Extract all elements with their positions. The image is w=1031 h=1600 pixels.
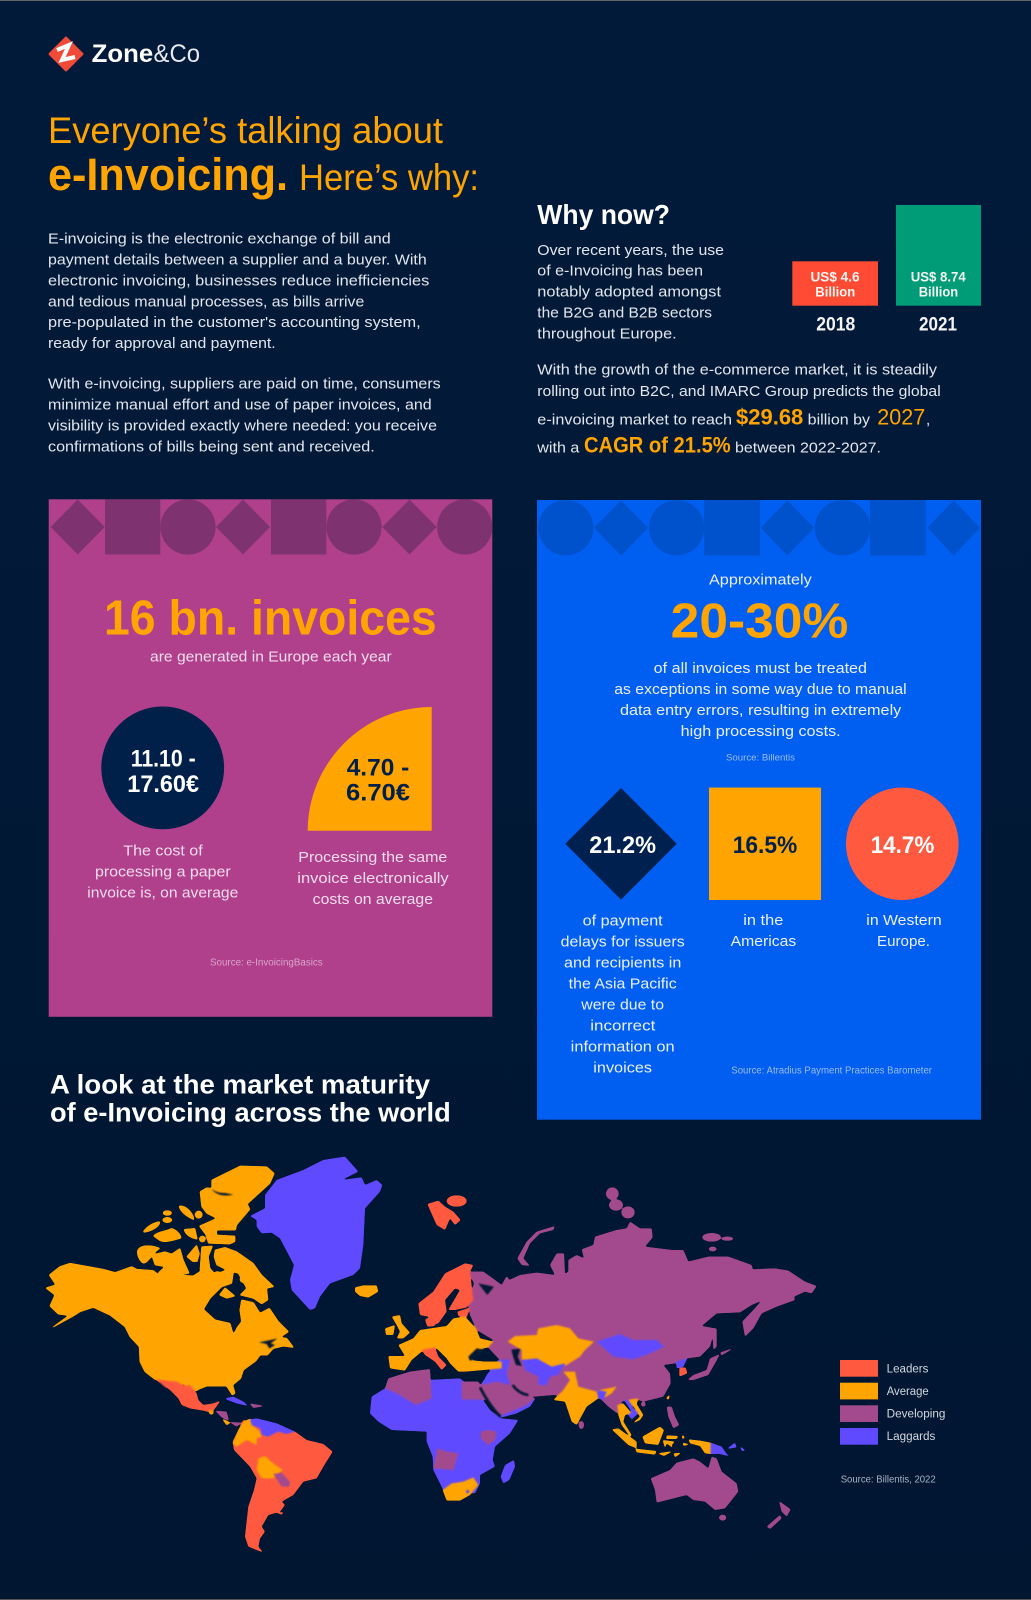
intro text block: confirmations of bills being sent and received. xyxy=(48,438,375,456)
description: high processing costs. xyxy=(681,723,841,740)
Papua New Guinea xyxy=(711,1443,746,1457)
intro text block: With e-invoicing, suppliers are paid on time, consumers xyxy=(48,376,441,393)
logo: Zone&Co xyxy=(50,38,200,70)
source: Source: Atradius Payment Practices Barometer xyxy=(731,1066,933,1077)
heading: market maturity: A look at the market maturity xyxy=(50,1069,430,1099)
Tasmania, New Zealand xyxy=(719,1501,791,1529)
market forecast text: billion by xyxy=(808,411,871,428)
map: Europe and Middle East xyxy=(385,1263,565,1417)
bar chart: market size xyxy=(792,205,981,336)
legend: Average xyxy=(887,1386,929,1398)
legend: Laggards xyxy=(887,1431,936,1443)
square: 16.5% xyxy=(709,788,821,900)
Arctic Canada islands xyxy=(137,1166,274,1304)
heading: market maturity xyxy=(50,1069,451,1128)
Central America xyxy=(209,1410,242,1427)
caption: Asia Pacific: and recipients in xyxy=(564,955,681,972)
caption: Asia Pacific xyxy=(561,913,685,1076)
caption: Asia Pacific: delays for issuers xyxy=(561,934,685,951)
intro text block: visibility is provided exactly where needed: you receive xyxy=(48,418,437,434)
panel: invoice exceptions and payment delays xyxy=(537,500,981,1120)
bar chart: market size: Billion xyxy=(815,285,855,300)
description: of all invoices must be treated xyxy=(654,660,867,677)
Indonesia xyxy=(612,1427,711,1457)
caption: paper: invoice is, on average xyxy=(87,885,238,902)
caption: Western Europe xyxy=(866,912,942,950)
market forecast text: rolling out into B2C, and IMARC Group predicts the global xyxy=(537,383,941,400)
title: Everyone’s talking about xyxy=(48,110,444,151)
caption: Asia Pacific: invoices xyxy=(593,1060,652,1076)
title: Here’s why: xyxy=(299,157,479,198)
panel: paper vs electronic invoice cost xyxy=(49,499,492,1017)
why now text: the B2G and B2B sectors xyxy=(537,305,712,322)
caption: Americas: in the xyxy=(743,912,783,929)
Continental Europe xyxy=(388,1317,502,1372)
bar chart: market size: US$ 8.74 xyxy=(911,269,966,284)
intro text block: and tedious manual processes, as bills arrive xyxy=(48,294,364,310)
market forecast text: e-invoicing market to reach xyxy=(537,411,732,428)
market forecast text xyxy=(536,362,941,458)
intro text block: payment details between a supplier and a buyer. With xyxy=(48,252,427,268)
caption: electronic: invoice electronically xyxy=(297,870,449,887)
diamond: 21.2%: 21.2% xyxy=(589,832,656,859)
headline: 16 bn invoices: 16 bn. invoices xyxy=(104,591,437,645)
caption: paper: processing a paper xyxy=(95,864,231,881)
quarter shape: electronic invoice cost: 6.70€ xyxy=(346,779,410,806)
caption: Americas xyxy=(731,912,796,950)
Mexico xyxy=(155,1379,221,1413)
intro text block: ready for approval and payment. xyxy=(48,335,276,352)
Italy xyxy=(422,1347,447,1370)
Philippines, Taiwan, Hainan xyxy=(641,1394,679,1428)
caption: Western Europe: in Western xyxy=(866,912,942,929)
map: Americas, Greenland xyxy=(46,1157,382,1553)
decorative shape band xyxy=(538,500,980,556)
Mongolia xyxy=(597,1334,664,1359)
source: map: Source: Billentis, 2022 xyxy=(841,1475,936,1486)
circle: 14.7%: 14.7% xyxy=(871,832,934,859)
source: Source: Billentis xyxy=(726,752,796,762)
intro text block xyxy=(48,230,441,456)
intro text block: electronic invoicing, businesses reduce inefficiencies xyxy=(48,272,429,290)
Australia xyxy=(651,1457,738,1510)
map: Africa xyxy=(370,1369,518,1501)
intro text block: minimize manual effort and use of paper invoices, and xyxy=(48,396,432,414)
circle: paper invoice cost: 17.60€ xyxy=(127,771,199,798)
description: as exceptions in some way due to manual xyxy=(614,681,907,698)
caption: paper xyxy=(87,843,238,902)
Middle East xyxy=(480,1353,565,1417)
intro text block: pre-populated in the customer's accounting system, xyxy=(48,314,421,331)
circle: paper invoice cost xyxy=(101,706,224,829)
caption: Western Europe: Europe. xyxy=(877,933,930,950)
source: Source: e-InvoicingBasics xyxy=(210,958,323,969)
why now text: throughout Europe. xyxy=(537,326,677,343)
circle: 14.7% xyxy=(846,788,959,900)
Korea xyxy=(676,1358,687,1377)
legend: Leaders xyxy=(887,1363,929,1375)
Britain and Ireland xyxy=(385,1315,410,1338)
legend: Developing xyxy=(887,1409,945,1421)
world map xyxy=(46,1157,817,1553)
quarter shape: electronic invoice cost: 4.70 - xyxy=(347,754,409,781)
market forecast text: between 2022-2027. xyxy=(735,440,881,457)
intro word: Approximately xyxy=(709,572,812,588)
caption: electronic: costs on average xyxy=(313,891,433,908)
market forecast text: with a xyxy=(536,440,580,457)
market forecast text: $29.68 xyxy=(736,404,803,429)
caption: Asia Pacific: information on xyxy=(571,1038,675,1056)
circle: paper invoice cost: 11.10 - xyxy=(131,745,196,772)
map: Southeast Asia xyxy=(612,1398,746,1457)
bar chart: market size: 2021 xyxy=(919,315,957,336)
North America xyxy=(46,1263,293,1395)
intro text block: E-invoicing is the electronic exchange of bill and xyxy=(48,230,391,248)
why now text: Over recent years, the use xyxy=(537,242,724,259)
Iceland xyxy=(355,1285,378,1298)
caption: Asia Pacific: incorrect xyxy=(590,1018,656,1034)
subheading: are generated in Europe each year xyxy=(150,648,392,665)
market forecast text: , xyxy=(926,411,930,428)
logo: Zone&Co: &Co xyxy=(154,40,200,68)
market forecast text: With the growth of the e-commerce market, it is steadily xyxy=(537,362,938,379)
Russia and China xyxy=(468,1222,817,1413)
Caspian Sea xyxy=(511,1349,522,1366)
title xyxy=(48,110,479,200)
legend xyxy=(840,1360,945,1445)
Scandinavia xyxy=(418,1263,473,1325)
why now text: notably adopted amongst xyxy=(537,284,722,301)
Svalbard xyxy=(427,1195,467,1230)
Kazakhstan xyxy=(508,1325,594,1368)
description xyxy=(614,660,907,740)
Caribbean xyxy=(224,1397,265,1408)
logo: Zone&Co: Zone xyxy=(92,40,153,68)
heading: why now: Why now? xyxy=(537,199,670,230)
caption: paper: The cost of xyxy=(123,843,204,860)
Madagascar xyxy=(501,1460,515,1483)
caption: electronic xyxy=(297,849,449,908)
why now text xyxy=(537,242,724,343)
Black Sea xyxy=(468,1348,492,1361)
Greenland xyxy=(250,1157,382,1310)
Japan, Sakhalin xyxy=(687,1328,735,1380)
caption: Asia Pacific: of payment xyxy=(583,913,664,930)
caption: Asia Pacific: the Asia Pacific xyxy=(569,976,677,992)
bar chart: market size: Billion xyxy=(919,285,958,300)
bar chart: market size: US$ 4.6 xyxy=(810,269,860,284)
Arctic Russia islands xyxy=(517,1187,733,1266)
title: e-Invoicing. xyxy=(48,149,288,200)
decorative shape band xyxy=(51,499,492,555)
bar chart: market size: 2018 xyxy=(816,315,855,336)
diamond: 21.2% xyxy=(565,788,677,900)
why now text: of e-Invoicing has been xyxy=(537,263,703,280)
heading: market maturity: of e-Invoicing across the world xyxy=(50,1098,451,1128)
caption: Asia Pacific: were due to xyxy=(580,996,664,1014)
square: 16.5%: 16.5% xyxy=(733,832,797,859)
market forecast text: CAGR of 21.5% xyxy=(584,433,731,458)
description: data entry errors, resulting in extremely xyxy=(620,702,902,719)
map: Eurasia north xyxy=(427,1187,817,1529)
quarter shape: electronic invoice cost xyxy=(308,707,432,831)
India xyxy=(553,1372,617,1429)
caption: Americas: Americas xyxy=(731,933,796,950)
Africa mainland xyxy=(370,1378,518,1493)
caption: electronic: Processing the same xyxy=(298,849,447,866)
market forecast text: 2027 xyxy=(877,404,925,429)
South America xyxy=(233,1418,333,1553)
headline: 20-30%: 20-30% xyxy=(671,594,848,648)
